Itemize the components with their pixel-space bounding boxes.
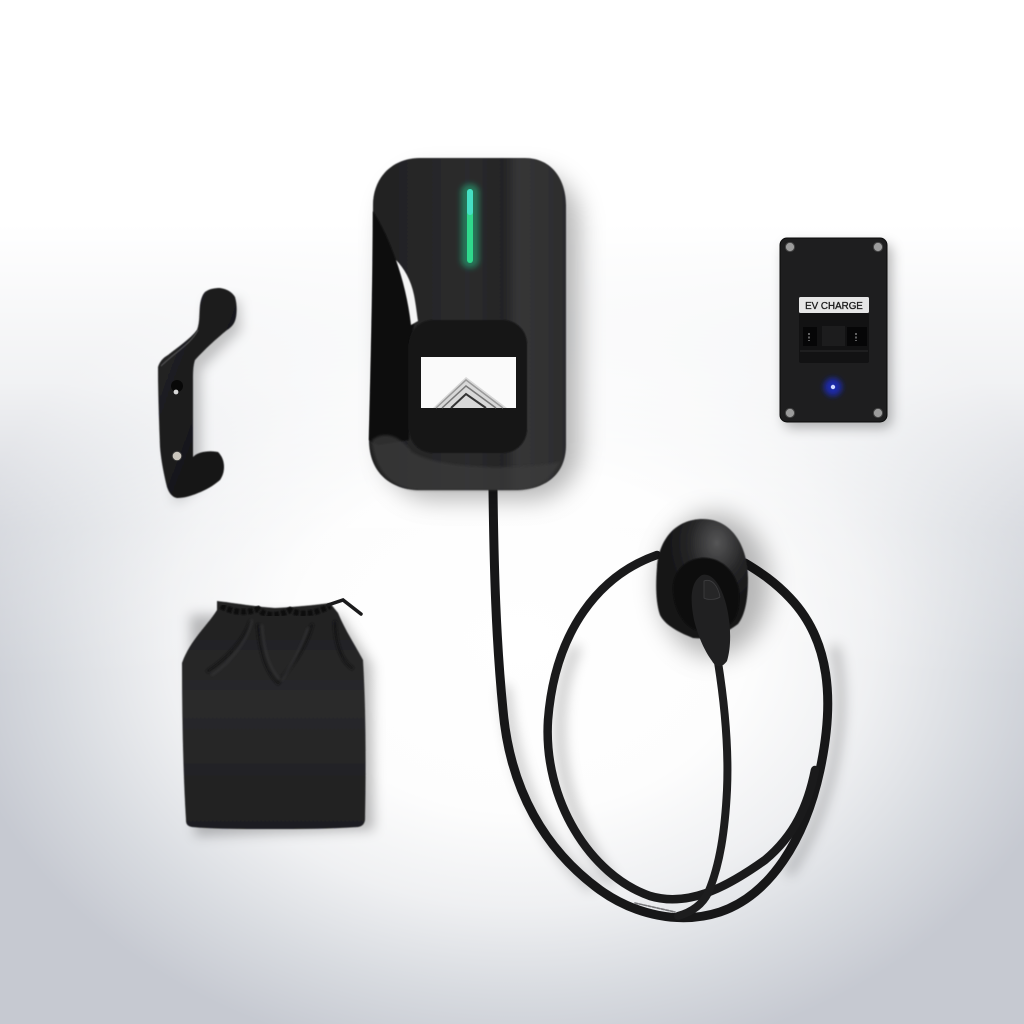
box shadow: [784, 244, 892, 428]
holster recess: [673, 558, 739, 630]
circuit breaker box: [780, 238, 892, 428]
upper screw: [171, 380, 183, 394]
hook shadow: [165, 300, 241, 503]
wall holster: [656, 519, 748, 638]
box body: [780, 238, 887, 422]
holster shadow: [658, 513, 770, 657]
storage bag: [182, 600, 374, 836]
EV CHARGE label: [799, 297, 869, 313]
unit shadow: [384, 172, 580, 500]
hook body: [158, 288, 237, 498]
gathered drawstring: [221, 606, 330, 615]
breaker switch: [799, 313, 869, 363]
drawstring toggle: [328, 600, 361, 614]
fabric folds: [208, 620, 352, 683]
mounting screws: [785, 242, 883, 418]
display recess: [409, 320, 527, 453]
EV CHARGE label: EV CHARGE: [805, 301, 863, 312]
bottom sheen: [372, 435, 560, 490]
lower screw: [172, 451, 182, 461]
unit body: [369, 158, 566, 490]
connector handle: [692, 575, 730, 666]
bag shadow: [190, 615, 374, 836]
display screen: [421, 357, 516, 408]
blue LED: [824, 378, 842, 396]
wall hook: [158, 288, 241, 503]
wall charger unit: [369, 158, 580, 500]
gloss highlight: [396, 260, 418, 325]
charger connector and holster: [656, 513, 770, 666]
status LED: [461, 184, 479, 268]
hook highlight: [161, 330, 198, 366]
left dark facet: [369, 211, 414, 445]
charging cable: [493, 490, 840, 918]
bag body: [182, 601, 366, 829]
handle button: [704, 580, 720, 599]
